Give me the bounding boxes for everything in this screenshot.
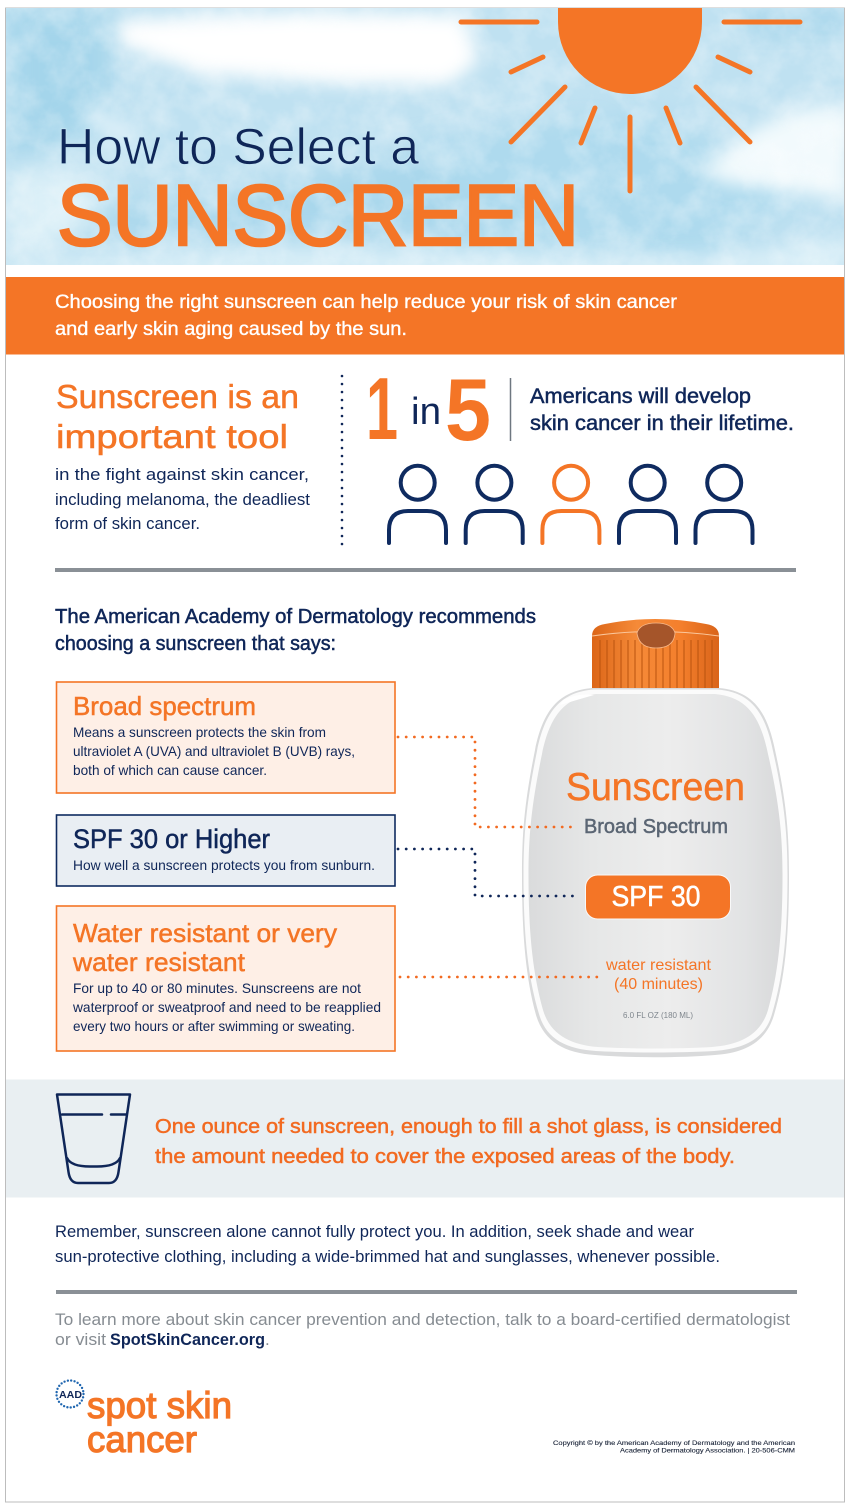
text block: fight against skin cancer: form of skin cancer. [55, 514, 200, 533]
statistic: 1 in 5: 5 [445, 360, 491, 459]
bottle label: water resistant: water resistant [605, 957, 712, 974]
panel: broad spectrum [56, 682, 395, 793]
panel: broad spectrum: ultraviolet A (UVA) and ultraviolet B (UVB) rays, [73, 743, 355, 759]
text block: Americans will develop skin cancer: skin cancer in their lifetime. [530, 412, 794, 435]
text block: fight against skin cancer [55, 465, 310, 533]
panel: orange intro band: and early skin aging caused by the sun. [55, 319, 407, 340]
icon: row of five people [389, 466, 752, 543]
panel: water resistant: For up to 40 or 80 minutes. Sunscreens are not [73, 980, 361, 996]
arrow: water resistant connector [400, 976, 599, 978]
panel: broad spectrum: both of which can cause cancer. [73, 762, 267, 778]
panel: SPF 30 or higher [56, 815, 395, 886]
icon: shot glass [57, 1094, 130, 1183]
title [57, 118, 579, 264]
bottle body [522, 688, 789, 1057]
text block: sunscreen alone cannot protect: Remember, sunscreen alone cannot fully protect you. In addition, seek shade and wear [55, 1222, 694, 1241]
text block: learn more: SpotSkinCancer.org [110, 1330, 265, 1349]
bottle label: SPF 30 pill: SPF 30 [612, 881, 700, 913]
heading: sunscreen is an important tool [56, 378, 299, 455]
logo: AAD spot skin cancer: AAD [59, 1390, 82, 1401]
bottle cap [592, 619, 719, 690]
bottle label: water resistant [605, 957, 712, 993]
text block: Americans will develop skin cancer [530, 385, 794, 435]
bottle label: Broad Spectrum: Broad Spectrum [584, 816, 728, 838]
copyright [553, 1439, 795, 1454]
text block: fight against skin cancer: including melanoma, the deadliest [55, 490, 310, 509]
text block: Americans will develop skin cancer: Americans will develop [530, 385, 751, 408]
heading: sunscreen is an important tool: Sunscreen is an [56, 378, 299, 415]
text block: sunscreen alone cannot protect [55, 1222, 720, 1266]
statistic: 1 in 5 [366, 359, 510, 459]
bottle label: Sunscreen: Sunscreen [566, 766, 745, 809]
illustration: sunscreen bottle [522, 619, 789, 1057]
arrow: SPF connector [398, 849, 575, 896]
copyright: Copyright © by the American Academy of Dermatology and the American [553, 1439, 795, 1447]
panel: water resistant: every two hours or after swimming or sweating. [73, 1018, 355, 1034]
copyright: Academy of Dermatology Association. | 20-506-CMM [620, 1448, 795, 1454]
text block: learn more: To learn more about skin cancer prevention and detection, talk to a board-certified dermatologist [55, 1310, 790, 1329]
heading: AAD recommendation: The American Academy of Dermatology recommends [55, 606, 536, 628]
panel: water resistant: Water resistant or very [73, 918, 337, 948]
statistic: 1 in 5: in [411, 391, 441, 433]
bottle label: SPF 30 pill [586, 875, 730, 919]
panel: water resistant [56, 906, 395, 1051]
logo: AAD spot skin cancer: spot skin [87, 1385, 232, 1426]
panel: SPF 30 or higher: How well a sunscreen protects you from sunburn. [73, 857, 375, 873]
bottle label: volume: 6.0 FL OZ (180 ML) [623, 1010, 693, 1020]
panel: broad spectrum: Means a sunscreen protects the skin from [73, 724, 326, 740]
text block: learn more [55, 1310, 790, 1349]
text block: sunscreen alone cannot protect: sun-protective clothing, including a wide-brimmed hat and sunglasses, whenever possible. [55, 1247, 720, 1266]
panel: water resistant: waterproof or sweatproof and need to be reapplied [72, 999, 381, 1015]
panel: orange intro band: Choosing the right sunscreen can help reduce your risk of skin cancer [55, 292, 678, 313]
bottle label: water resistant: (40 minutes) [614, 976, 703, 993]
panel: one ounce band [6, 1080, 844, 1198]
text block: learn more: . [265, 1330, 270, 1349]
panel: one ounce band: One ounce of sunscreen, enough to fill a shot glass, is considered [155, 1115, 782, 1138]
text block: learn more: or visit [55, 1330, 106, 1349]
panel: watercolor sky header [6, 8, 850, 275]
title: SUNSCREEN [57, 168, 579, 264]
panel: SPF 30 or higher: SPF 30 or Higher [73, 824, 270, 854]
statistic: 1 in 5: 1 [366, 359, 398, 458]
arrow: broad spectrum connector [398, 737, 578, 827]
heading: AAD recommendation: choosing a sunscreen that says: [55, 633, 336, 655]
panel: one ounce band: the amount needed to cover the exposed areas of the body. [155, 1145, 735, 1168]
icon: sun with rays [461, 8, 800, 191]
text block: fight against skin cancer: in the fight against skin cancer, [55, 465, 309, 484]
heading: sunscreen is an important tool: important tool [56, 418, 288, 455]
logo: AAD spot skin cancer [56, 1380, 232, 1460]
panel: broad spectrum: Broad spectrum [73, 691, 256, 721]
title: How to Select a [57, 118, 420, 175]
panel: water resistant: water resistant [72, 947, 246, 977]
logo: AAD spot skin cancer: cancer [87, 1419, 197, 1460]
heading: AAD recommendation [55, 606, 536, 655]
panel: orange intro band [6, 277, 844, 354]
